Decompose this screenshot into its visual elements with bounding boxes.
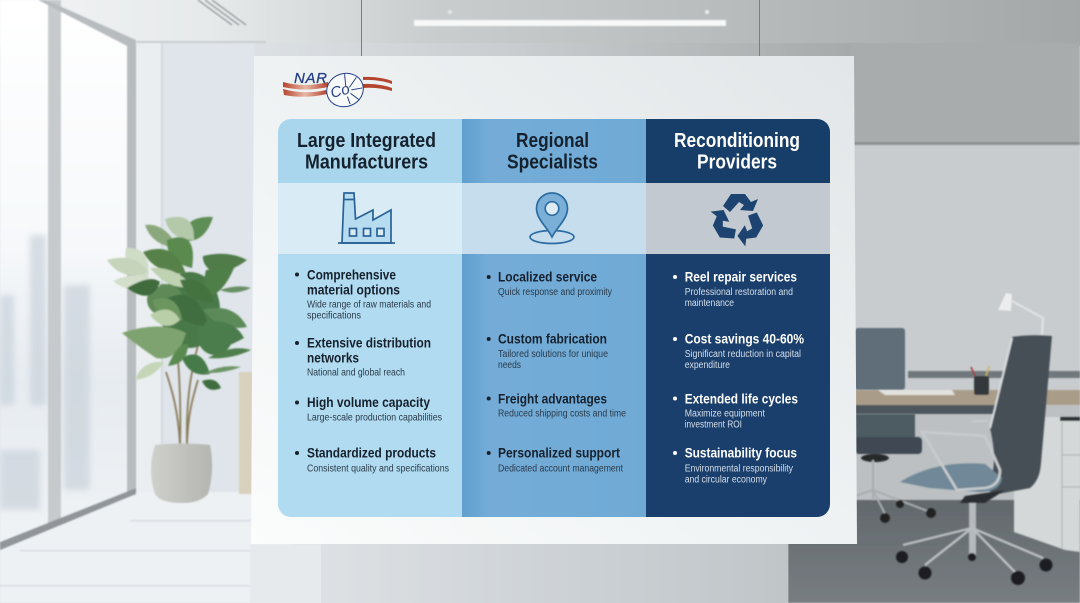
item: Custom fabrication: needs — [498, 360, 521, 371]
item: Comprehensive material options — [295, 266, 431, 322]
item: Personalized support: Dedicated account management — [498, 464, 623, 474]
body band — [646, 254, 830, 517]
logo wheel — [322, 68, 368, 112]
column: Regional Specialists — [462, 119, 646, 517]
back office chair — [855, 328, 936, 523]
item: Freight advantages — [487, 390, 626, 420]
NARCo logo — [283, 68, 392, 112]
ceiling vent — [198, 0, 246, 25]
header band — [278, 119, 462, 183]
ceiling — [0, 0, 1080, 46]
back wall — [160, 43, 860, 503]
header band — [646, 119, 830, 183]
body band — [278, 254, 462, 517]
heading: Regional Specialists: Regional — [516, 130, 589, 152]
box behind board — [239, 372, 253, 494]
item: Cost savings 40-60%: Significant reduction in capital — [685, 349, 801, 360]
item: Extensive distribution networks: networks — [307, 350, 359, 366]
desk with shelf and items — [855, 366, 1080, 414]
item: Standardized products: Standardized products — [307, 445, 436, 461]
window — [0, 0, 136, 550]
logo text Co: Co — [329, 80, 352, 102]
comparison table — [278, 119, 830, 517]
item: Extended life cycles — [673, 390, 798, 430]
item: Extensive distribution networks — [295, 335, 431, 378]
heading: Reconditioning Providers: Providers — [697, 152, 777, 174]
icon: map pin — [530, 193, 574, 244]
drawer cabinet — [1014, 417, 1080, 552]
plant leaf mass — [147, 272, 233, 355]
item: High volume capacity — [295, 394, 442, 424]
icon: factory — [338, 193, 395, 243]
item: Cost savings 40-60% — [673, 331, 804, 371]
heading: Large Integrated Manufacturers — [297, 130, 436, 174]
item: Custom fabrication: Custom fabrication — [498, 331, 607, 347]
item: Standardized products — [295, 445, 449, 474]
plant stems — [166, 320, 205, 444]
item: Reel repair services: maintenance — [685, 298, 734, 309]
item: Freight advantages: Freight advantages — [498, 390, 607, 406]
column: Reconditioning Providers — [646, 119, 830, 517]
item: Localized service: Localized service — [498, 269, 597, 285]
list: Large Integrated Manufacturers — [295, 266, 449, 474]
pedestal under board — [321, 544, 788, 603]
icon band — [278, 183, 462, 254]
item: Sustainability focus — [673, 445, 797, 486]
heading: Regional Specialists: Specialists — [507, 152, 598, 174]
item: Personalized support: Personalized support — [498, 445, 620, 461]
plant pot — [151, 444, 212, 503]
heading: Regional Specialists — [507, 130, 598, 174]
item: Sustainability focus: Environmental responsibility — [685, 464, 793, 474]
item: Custom fabrication — [487, 331, 608, 371]
item: Reel repair services: Reel repair services — [685, 269, 797, 285]
list: Regional Specialists — [487, 269, 626, 474]
item: Extensive distribution networks: Extensive distribution — [307, 335, 431, 351]
item: Personalized support — [487, 445, 623, 474]
item: Custom fabrication: Tailored solutions for unique — [498, 349, 608, 360]
icon: recycle — [706, 194, 767, 249]
front office chair — [896, 335, 1052, 585]
desk lamp — [998, 293, 1043, 336]
item: Reel repair services — [673, 269, 797, 309]
floor — [0, 492, 1080, 603]
hanging wires — [362, 0, 760, 56]
heading: Reconditioning Providers — [674, 130, 800, 174]
item: Extended life cycles: Maximize equipment — [685, 408, 765, 420]
board panel — [251, 56, 857, 544]
heading: Large Integrated Manufacturers: Large Integrated — [297, 130, 436, 152]
item: Extensive distribution networks: National and global reach — [307, 368, 405, 378]
right wall — [850, 43, 1080, 505]
item: Cost savings 40-60%: expenditure — [685, 360, 730, 371]
item: Comprehensive material options: material options — [307, 282, 400, 298]
plant — [107, 217, 251, 503]
item: Comprehensive material options: specifications — [307, 310, 361, 322]
item: Sustainability focus: and circular economy — [685, 474, 767, 486]
window frame — [0, 0, 136, 550]
item: Localized service: Quick response and proximity — [498, 287, 612, 298]
item: Freight advantages: Reduced shipping costs and time — [498, 408, 626, 420]
header band — [462, 119, 646, 183]
column: Large Integrated Manufacturers — [278, 119, 462, 517]
item: Reel repair services: Professional restoration and — [685, 287, 793, 298]
icon band — [646, 183, 830, 254]
item: Extended life cycles: Extended life cycles — [685, 390, 798, 406]
list: Reconditioning Providers — [673, 269, 804, 486]
item: Extended life cycles: investment ROI — [685, 420, 742, 430]
item: High volume capacity: Large-scale production capabilities — [307, 412, 442, 424]
heading: Large Integrated Manufacturers: Manufacturers — [305, 152, 428, 174]
body band — [462, 254, 646, 517]
item: Cost savings 40-60%: Cost savings 40-60% — [685, 331, 804, 347]
item: Comprehensive material options: Comprehensive — [307, 266, 396, 282]
item: Standardized products: Consistent quality and specifications — [307, 464, 449, 474]
logo stripes — [283, 82, 328, 97]
icon band — [462, 183, 646, 254]
pillar and left wall — [136, 41, 266, 494]
heading: Reconditioning Providers: Reconditioning — [674, 130, 800, 152]
plant leaves — [107, 217, 251, 390]
item: High volume capacity: High volume capacity — [307, 394, 430, 410]
display board — [251, 56, 857, 544]
ceiling light — [414, 10, 726, 26]
city skyline — [0, 235, 90, 510]
logo text NAR: NAR — [294, 70, 327, 87]
item: Comprehensive material options: Wide range of raw materials and — [307, 300, 431, 310]
item: Localized service — [487, 269, 612, 298]
item: Sustainability focus: Sustainability focus — [685, 445, 797, 461]
